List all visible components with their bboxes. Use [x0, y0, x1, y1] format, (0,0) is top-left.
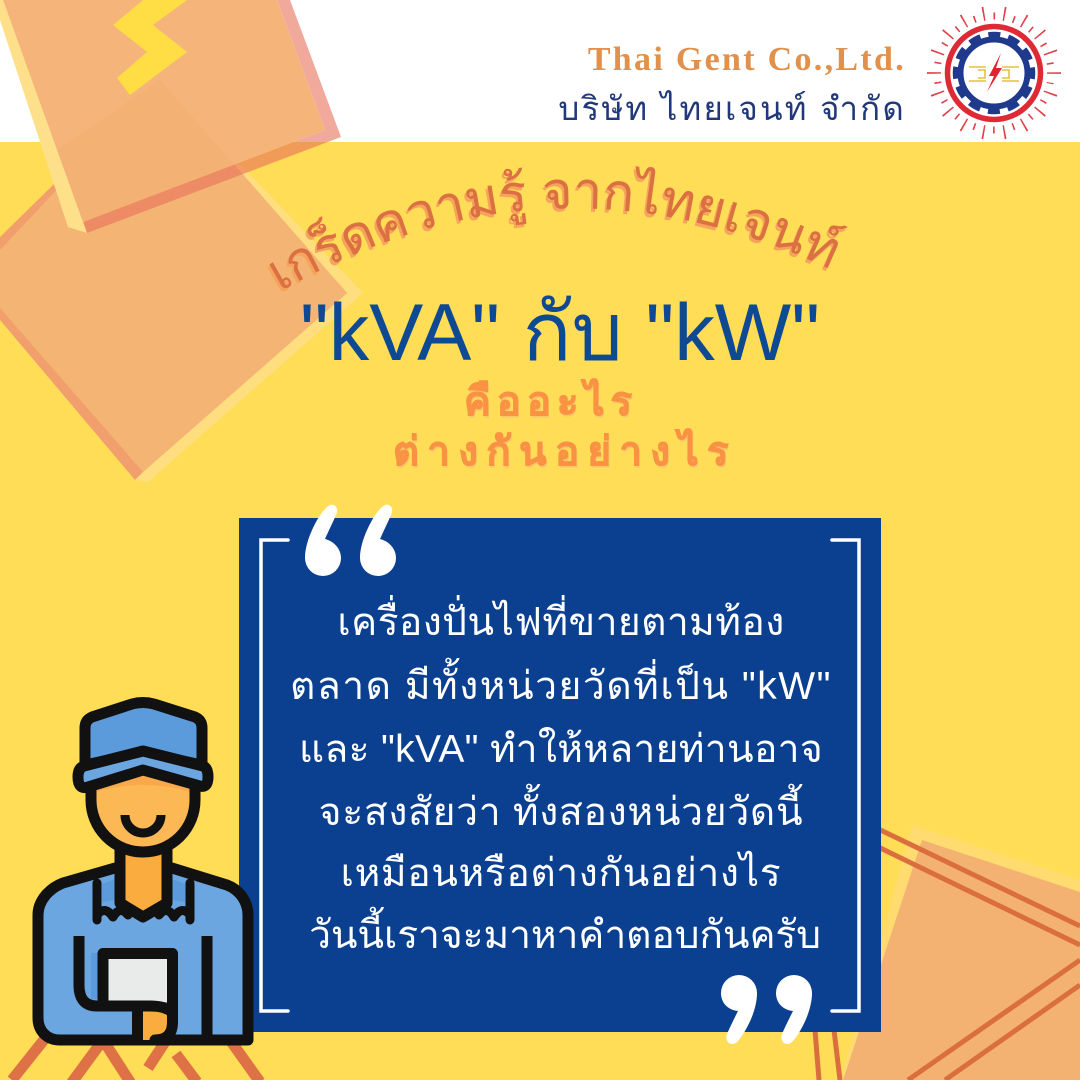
main title: "kVA" กับ "kW" — [300, 288, 820, 378]
body text: เครื่องปั่นไฟที่ขายตามท้อง — [337, 595, 785, 644]
worker face fill — [91, 780, 195, 852]
company name thai: บริษัท ไทยเจนท์ จำกัด — [558, 90, 906, 127]
worker paper — [108, 959, 167, 1002]
quote panel — [239, 518, 881, 1032]
worker face outline — [91, 780, 195, 852]
decorative shapes bottom right — [815, 825, 1080, 1080]
body text: เหมือนหรือต่างกันอย่างไร — [341, 851, 781, 895]
worker mouth — [125, 815, 161, 833]
decorative squares top left — [0, 0, 363, 482]
bracket frame right — [832, 540, 859, 1011]
arched heading: เกร็ดความรู้ จากไทยเจนท์ — [268, 169, 846, 292]
worker hand — [137, 1008, 172, 1040]
body text: วันนี้เราจะมาหาคำตอบกันครับ — [309, 906, 821, 957]
logo — [928, 7, 1060, 139]
bracket frame left — [261, 540, 288, 1011]
worker forearm line — [132, 1006, 143, 1040]
subtitle: ต่างกันอย่างไร — [393, 428, 737, 474]
subtitle: คืออะไร — [465, 380, 639, 426]
worker face shadow — [95, 773, 191, 792]
company name english: Thai Gent Co.,Ltd. — [588, 41, 906, 78]
worker body — [38, 868, 248, 1040]
decorative lines bottom left — [12, 1036, 260, 1080]
subtitle: ต่างกันอย่างไร — [394, 430, 738, 476]
arched heading: เกร็ดความรู้ จากไทยเจนท์ — [270, 166, 848, 288]
subtitle — [393, 378, 738, 476]
worker cap crown — [85, 702, 202, 765]
subtitle: คืออะไร — [464, 378, 638, 424]
worker cap brim — [78, 751, 208, 788]
icon: opening quotation mark — [305, 505, 396, 576]
body text: จะสงสัยว่า ทั้งสองหน่วยวัดนี้ — [319, 783, 803, 834]
worker collar — [97, 883, 190, 920]
worker collar panels — [102, 879, 185, 902]
body text: ตลาด มีทั้งหน่วยวัดที่เป็น "kW" — [290, 657, 832, 708]
worker right strap — [202, 936, 212, 1040]
body text: และ "kVA" ทำให้หลายท่านอาจ — [299, 727, 823, 771]
icon: yellow lightning mark — [113, 0, 187, 95]
icon: closing quotation mark — [721, 975, 812, 1044]
worker neck — [120, 845, 167, 917]
icon: worker illustration — [38, 702, 248, 1040]
body text — [290, 595, 832, 957]
worker left strap and arm — [79, 936, 172, 1012]
worker clipboard frame — [103, 954, 172, 1040]
worker clipboard shadow — [91, 953, 99, 999]
